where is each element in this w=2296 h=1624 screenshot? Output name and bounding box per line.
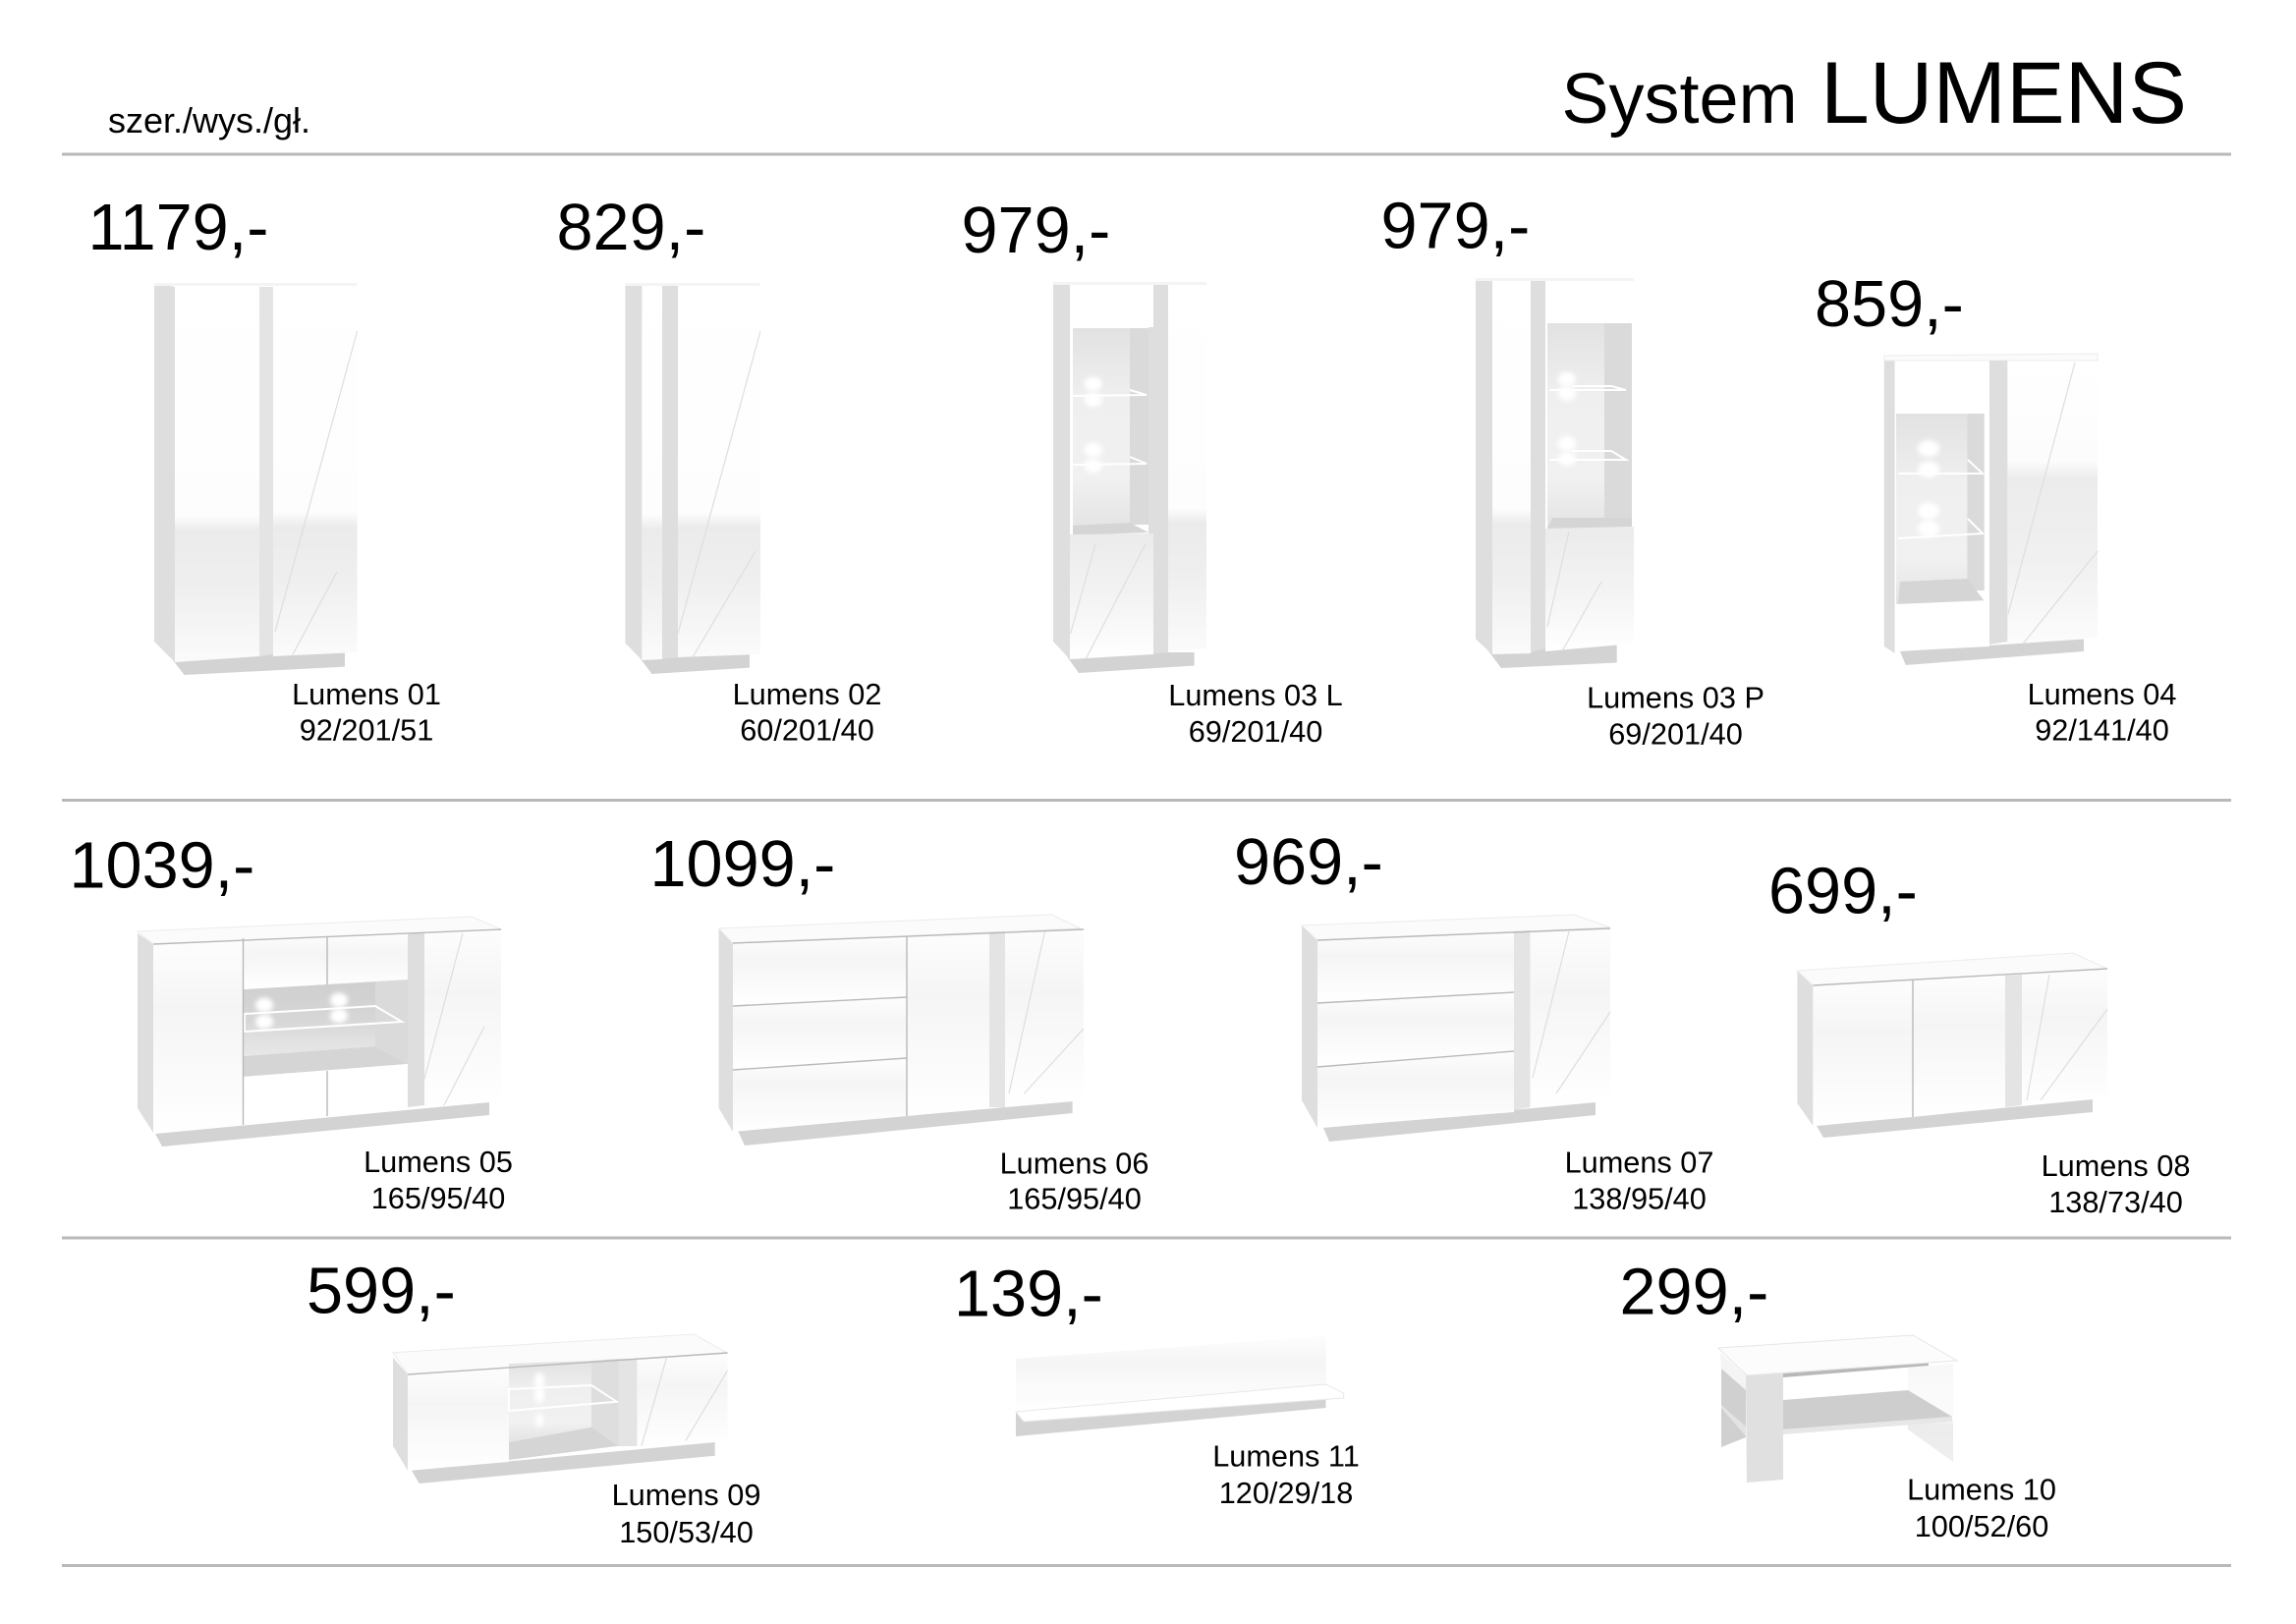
product: Lumens 08 [1768, 855, 2190, 1219]
price: 139,- [954, 1258, 1103, 1330]
price: 969,- [1234, 826, 1383, 899]
label: 60/201/40 [740, 713, 874, 747]
label: Lumens 08 [2042, 1148, 2190, 1183]
price: 1179,- [88, 192, 268, 264]
label: 165/95/40 [371, 1181, 505, 1215]
product: Lumens 09 [307, 1256, 760, 1549]
price: 1099,- [650, 828, 835, 901]
product: Lumens 11 [954, 1258, 1360, 1510]
label: 165/95/40 [1007, 1181, 1142, 1216]
label: 100/52/60 [1915, 1509, 2048, 1543]
column note: dimensions: szer./wys./gł. [108, 100, 310, 140]
label: Lumens 11 [1212, 1438, 1360, 1474]
label: Lumens 10 [1907, 1472, 2056, 1507]
product: Lumens 07 [1234, 826, 1713, 1216]
label: Lumens 03 P [1587, 680, 1764, 715]
label: 150/53/40 [619, 1515, 754, 1549]
price: 859,- [1815, 268, 1964, 341]
label: 138/95/40 [1572, 1181, 1707, 1216]
furniture: display cabinet [1884, 354, 2098, 665]
price: 979,- [1381, 191, 1530, 263]
label: 138/73/40 [2048, 1185, 2183, 1219]
product: Lumens 02 [556, 192, 881, 747]
furniture: coffee table [1718, 1335, 1957, 1483]
product: Lumens 04 [1815, 268, 2176, 747]
furniture: TV cabinet [393, 1334, 727, 1484]
product: Lumens 06 [650, 828, 1148, 1216]
product: Lumens 01 [88, 192, 441, 747]
price: 599,- [307, 1256, 456, 1328]
label: Lumens 03 L [1168, 678, 1343, 712]
product: Lumens 05 [69, 829, 513, 1215]
title: System [1562, 60, 1798, 139]
label: Lumens 04 [2028, 677, 2176, 711]
label: Lumens 07 [1565, 1146, 1713, 1179]
price: 829,- [556, 192, 705, 264]
furniture: sideboard with three drawers [1302, 915, 1610, 1142]
furniture: sideboard with drawers [719, 915, 1084, 1146]
label: 92/141/40 [2035, 713, 2169, 747]
label: 69/201/40 [1608, 717, 1743, 752]
furniture: wall shelf [1016, 1336, 1344, 1436]
furniture: two-door cabinet [154, 283, 358, 675]
label: Lumens 02 [733, 677, 881, 711]
label: Lumens 06 [1000, 1146, 1148, 1181]
price: 299,- [1619, 1256, 1768, 1328]
price: 699,- [1768, 855, 1918, 927]
price: 1039,- [69, 829, 254, 902]
product: Lumens 03 L [961, 195, 1343, 749]
furniture: narrow cabinet [625, 283, 760, 674]
label: 92/201/51 [300, 713, 433, 747]
label: Lumens 09 [612, 1478, 760, 1512]
label: 69/201/40 [1189, 714, 1322, 749]
label: 120/29/18 [1219, 1476, 1353, 1510]
title: LUMENS [1820, 43, 2187, 141]
price: 979,- [961, 195, 1110, 267]
product: Lumens 03 P [1381, 191, 1764, 752]
furniture: glass cabinet left [1053, 282, 1206, 673]
label: Lumens 05 [364, 1145, 513, 1179]
furniture: glass cabinet right [1476, 278, 1634, 668]
product: Lumens 10 [1619, 1256, 2056, 1543]
furniture: three-door sideboard [1797, 953, 2107, 1138]
furniture: sideboard with display [138, 917, 501, 1147]
label: Lumens 01 [292, 677, 441, 711]
